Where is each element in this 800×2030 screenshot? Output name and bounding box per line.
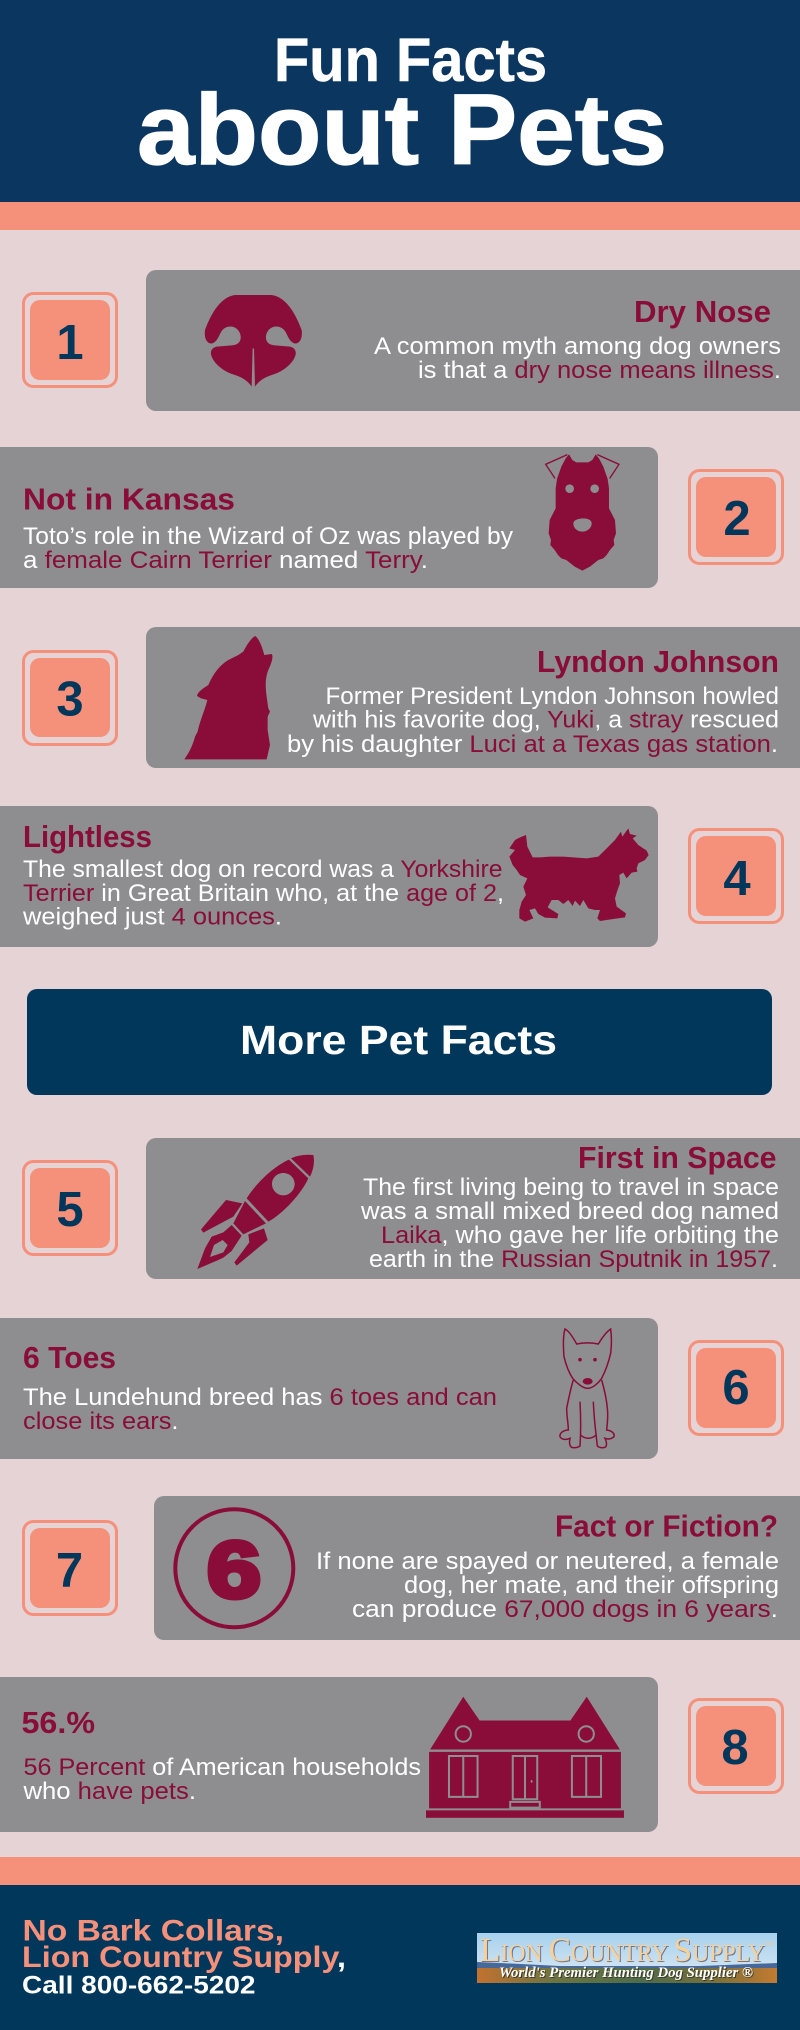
fact 3 panel bbox=[24, 627, 800, 768]
fact 4 text: Terrier in Great Britain who, at the age of 2, bbox=[23, 880, 504, 907]
fact 8 heading: 56.% bbox=[22, 1705, 95, 1740]
fact 2 panel bbox=[0, 447, 782, 588]
number badge 6 bbox=[690, 1342, 782, 1434]
icon: house bbox=[426, 1697, 624, 1818]
fact 5 heading: First in Space bbox=[578, 1140, 776, 1175]
title: about Pets bbox=[137, 74, 667, 186]
number badge 5 bbox=[24, 1162, 116, 1254]
fact 1 heading: Dry Nose bbox=[634, 294, 771, 329]
logo: lion country supply bbox=[477, 1932, 777, 1983]
fact 3 text: with his favorite dog, Yuki, a stray rescued bbox=[312, 706, 779, 734]
number badge 1 bbox=[24, 294, 116, 386]
fact 1 text: A common myth among dog owners bbox=[374, 333, 781, 360]
number badge 3: 3 bbox=[56, 672, 84, 726]
fact 8 panel bbox=[0, 1677, 782, 1832]
number badge 2: 2 bbox=[723, 492, 751, 546]
fact 2 text bbox=[23, 523, 513, 574]
icon: howling wolf bbox=[184, 636, 272, 759]
logo: lion country supply: World's Premier Hunting Dog Supplier ® bbox=[499, 1965, 753, 1981]
icon: circled six: 6 bbox=[207, 1525, 261, 1614]
fact 5 text: earth in the Russian Sputnik in 1957 . bbox=[369, 1246, 778, 1273]
footer bbox=[0, 1857, 800, 2030]
fact 2 heading: Not in Kansas bbox=[23, 482, 235, 516]
section banner: more pet facts: More Pet Facts bbox=[240, 1017, 557, 1063]
fact 7 text: can produce 67,000 dogs in 6 years . bbox=[352, 1596, 778, 1623]
number badge 1: 1 bbox=[56, 316, 84, 370]
fact 1 panel bbox=[24, 270, 800, 411]
logo: lion country supply: LION COUNTRY SUPPLY bbox=[480, 1932, 765, 1969]
footer text: Lion Country Supply , bbox=[22, 1941, 346, 1974]
icon: rocket bbox=[197, 1155, 314, 1269]
section banner: more pet facts bbox=[27, 989, 772, 1095]
fact 4 text: weighed just 4 ounces. bbox=[22, 904, 282, 930]
icon: sitting dog outline bbox=[560, 1329, 614, 1448]
fact 6 heading: 6 Toes bbox=[23, 1340, 116, 1375]
number badge 4 bbox=[690, 830, 782, 922]
fact 1 text: is that a dry nose means illness . bbox=[418, 357, 781, 384]
header banner bbox=[0, 0, 800, 230]
number badge 7: 7 bbox=[56, 1544, 83, 1598]
fact 1 text bbox=[374, 333, 781, 384]
fact 7 text: If none are spayed or neutered, a female bbox=[316, 1548, 779, 1575]
fact 2 text: a female Cairn Terrier named Terry. bbox=[23, 547, 428, 574]
number badge 3 bbox=[24, 652, 116, 744]
fact 6 text: The Lundehund breed has 6 toes and can bbox=[23, 1384, 497, 1411]
icon: circled six bbox=[175, 1509, 293, 1627]
fact 3 text: by his daughter Luci at a Texas gas station . bbox=[287, 731, 778, 758]
fact 8 text: 56 Percent of American households bbox=[24, 1754, 421, 1781]
fact 6 text bbox=[23, 1384, 497, 1435]
fact 6 panel bbox=[0, 1318, 782, 1459]
fact 4 text bbox=[22, 856, 504, 930]
fact 5 text: Laika, who gave her life orbiting the bbox=[381, 1222, 779, 1249]
number badge 4: 4 bbox=[723, 852, 751, 906]
number badge 5: 5 bbox=[56, 1183, 84, 1237]
number badge 8 bbox=[690, 1700, 782, 1792]
fact 4 text: The smallest dog on record was a Yorkshire bbox=[23, 856, 502, 883]
title bbox=[137, 26, 667, 186]
number badge 2 bbox=[690, 470, 782, 564]
footer text: No Bark Collars, bbox=[22, 1914, 284, 1948]
number badge 8: 8 bbox=[721, 1721, 749, 1775]
fact 7 heading: Fact or Fiction? bbox=[555, 1508, 778, 1544]
number badge 7 bbox=[24, 1522, 116, 1614]
fact 3 heading: Lyndon Johnson bbox=[537, 644, 779, 679]
logo: lion country supply: TM bbox=[765, 1942, 774, 1948]
fact 3 text bbox=[287, 683, 779, 758]
icon: dog nose bbox=[205, 295, 302, 387]
fact 5 text: was a small mixed breed dog named bbox=[360, 1198, 779, 1225]
footer text: Call 800-662-5202 bbox=[22, 1972, 255, 2000]
icon: yorkshire terrier bbox=[509, 828, 649, 922]
fact 7 text bbox=[316, 1548, 779, 1623]
title: Fun Facts bbox=[274, 26, 547, 94]
footer text bbox=[22, 1914, 346, 2000]
fact 6 text: close its ears . bbox=[23, 1408, 178, 1435]
icon: terrier head bbox=[546, 454, 619, 571]
fact 2 text: Toto’s role in the Wizard of Oz was played by bbox=[23, 523, 513, 550]
fact 5 text: The first living being to travel in space bbox=[363, 1174, 779, 1201]
fact 7 panel bbox=[24, 1496, 800, 1640]
fact 4 panel bbox=[0, 806, 782, 947]
fact 3 text: Former President Lyndon Johnson howled bbox=[326, 683, 779, 710]
fact 5 text bbox=[360, 1174, 779, 1273]
fact 5 panel bbox=[24, 1138, 800, 1279]
fact 8 text bbox=[22, 1754, 421, 1805]
fact 4 heading: Lightless bbox=[23, 819, 152, 854]
number badge 6: 6 bbox=[722, 1361, 750, 1415]
fact 7 text: dog, her mate, and their offspring bbox=[404, 1572, 779, 1599]
fact 8 text: who have pets . bbox=[22, 1778, 196, 1805]
